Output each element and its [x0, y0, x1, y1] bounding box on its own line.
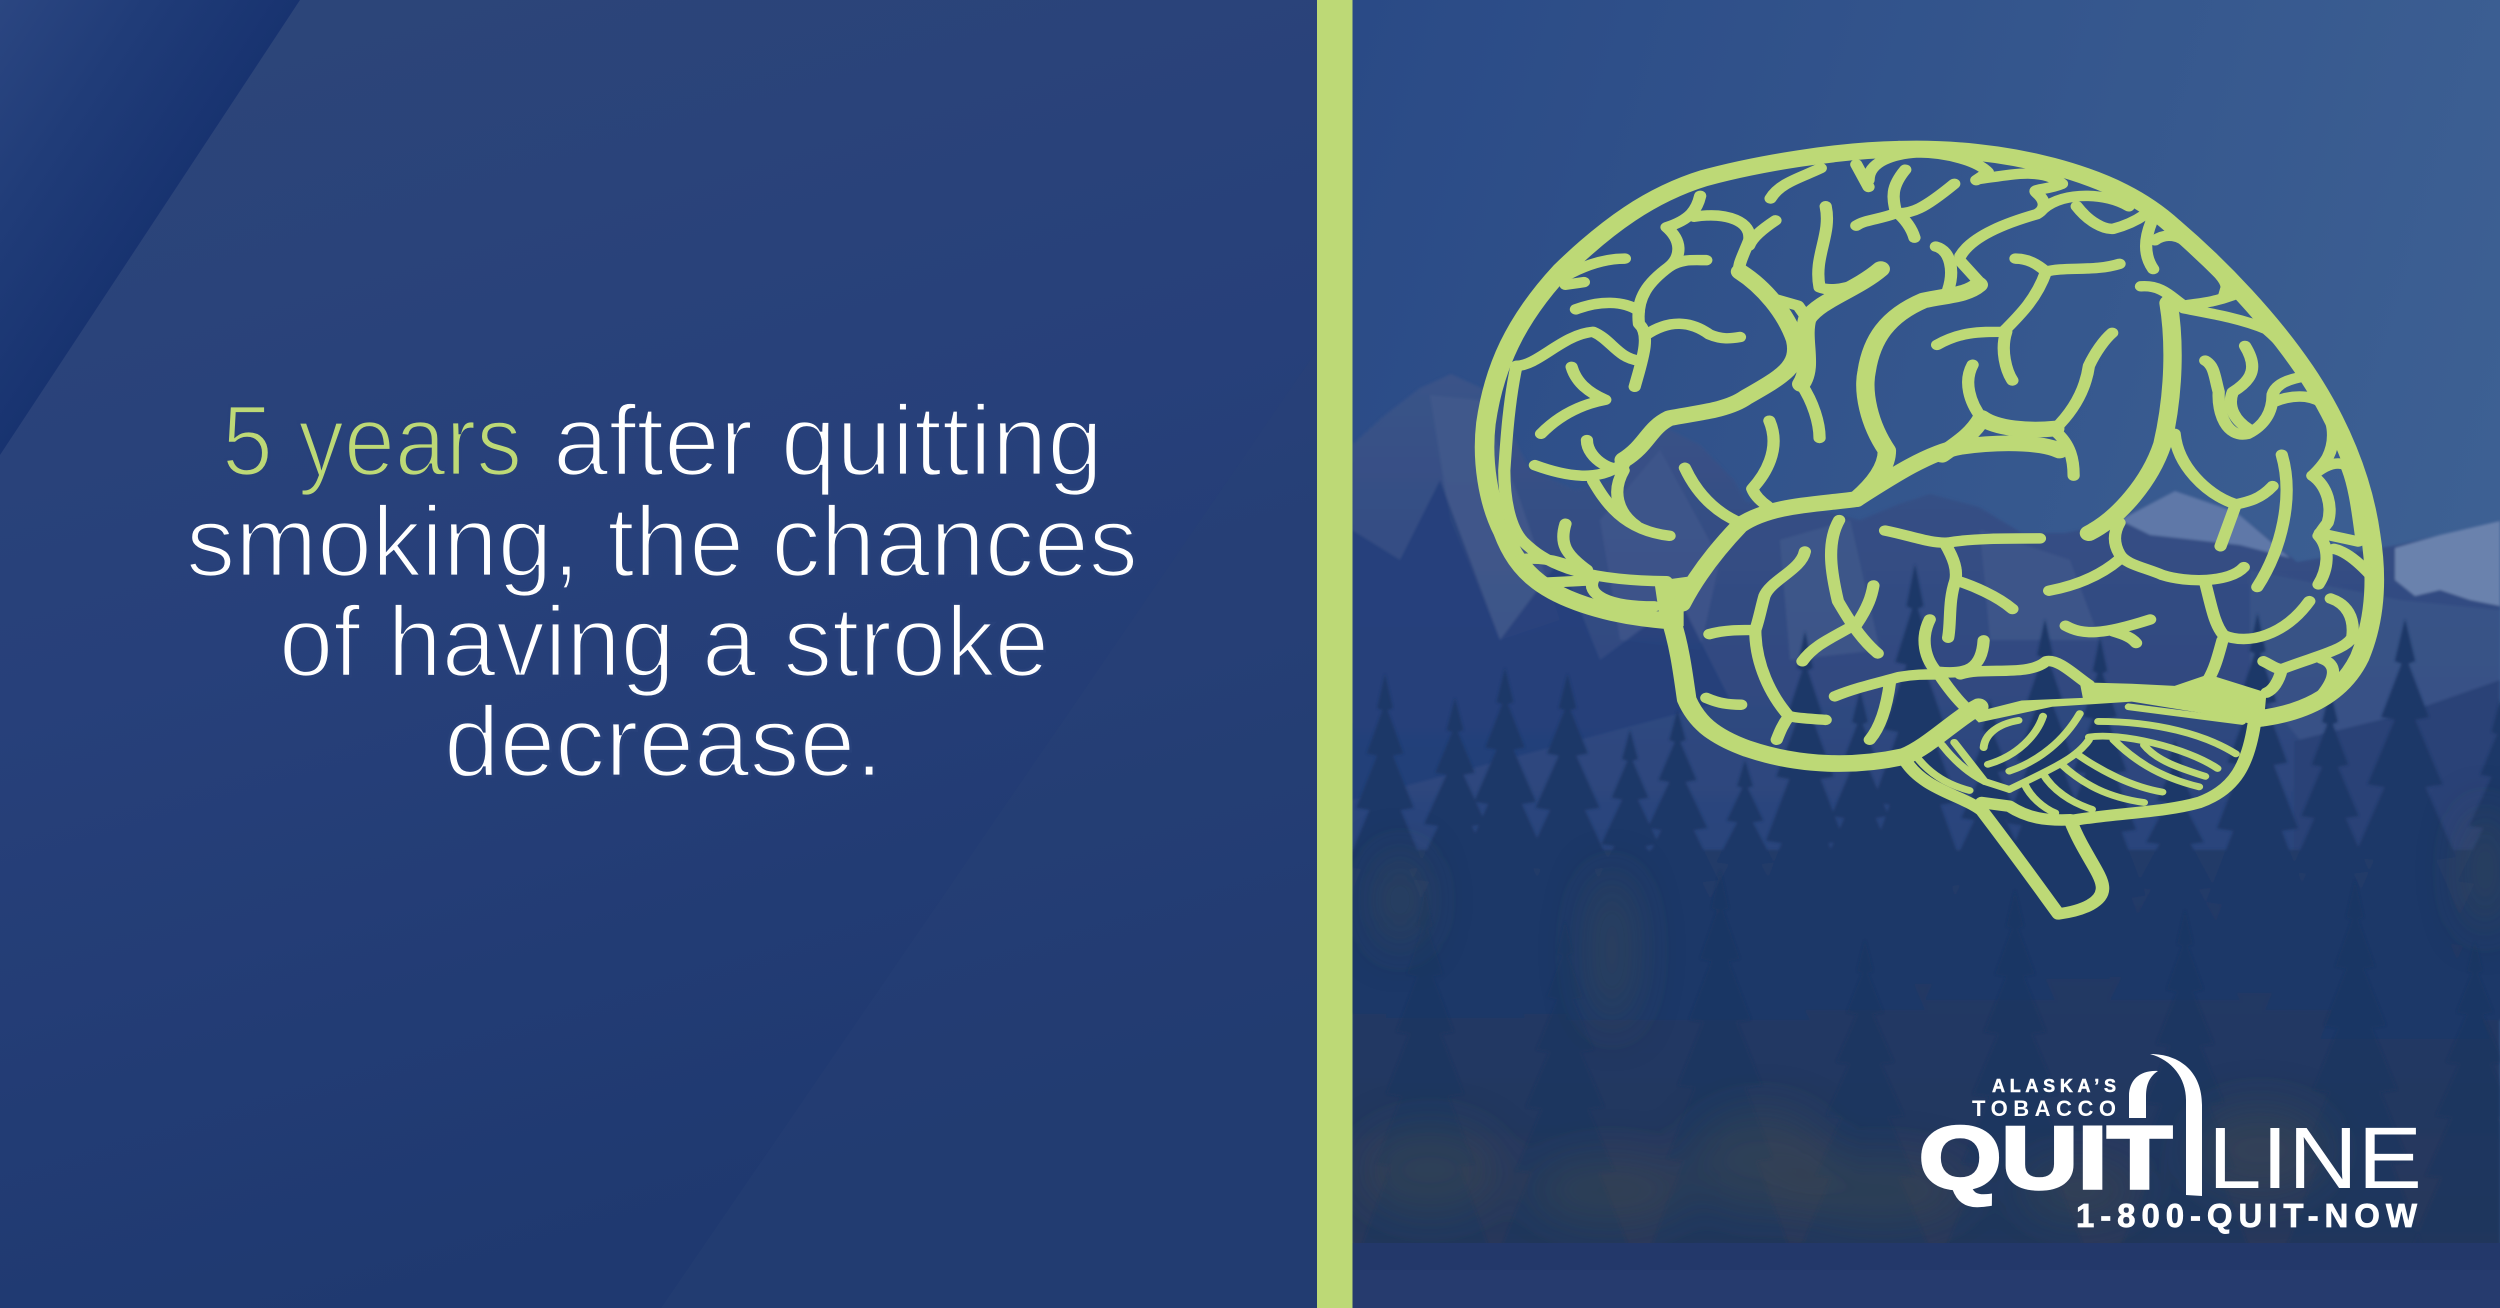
junction mass at lower left of temporal lobe: [1654, 575, 1700, 626]
text: after quitting: after quitting: [553, 385, 1103, 497]
main statement text: [186, 385, 1138, 798]
text: Alaska's: ALASKA’S: [1992, 1076, 2116, 1096]
text: LINE: LINE: [2208, 1110, 2422, 1207]
text: decrease.: decrease.: [444, 686, 883, 798]
decorative top-left dark wedge: [0, 0, 300, 455]
cerebellum and brain stem outline: [1905, 724, 2254, 914]
logo arch: short arc: [2129, 1071, 2158, 1118]
forest: [1320, 564, 2500, 1250]
text: QUIT: QUIT: [1919, 1108, 2172, 1207]
highlighted text: 5 years: 5 years: [222, 385, 522, 497]
second row of darker trees: [1360, 870, 2500, 1250]
thick sulci: [1624, 269, 2173, 604]
icon: brain outline: [1485, 149, 2374, 914]
lake: [1352, 1243, 2500, 1308]
text: of having a stroke: of having a stroke: [279, 586, 1049, 698]
decorative lower-right lighter facet: [661, 350, 1317, 1308]
text: smoking, the chances: smoking, the chances: [186, 486, 1138, 598]
medium sulci: [1504, 152, 2371, 740]
text: phone number: 1-800-QUIT-NOW: [2076, 1197, 2418, 1234]
logo arch: tall arc: [2150, 1054, 2202, 1196]
text: Tobacco: TOBACCO: [1972, 1096, 2116, 1121]
logo: Alaska's Tobacco Quitline: [1919, 1054, 2422, 1234]
cerebellum folds: [1914, 707, 2242, 813]
brain outer rim: [1485, 149, 2374, 764]
central brain mass above the cerebellum: [1970, 674, 2266, 727]
green vertical divider: [1317, 0, 1352, 1308]
autumn foliage tints: [1360, 806, 2500, 1224]
panel: right photo background of mountains and forest: [1320, 0, 2500, 1308]
panel: left background: [0, 0, 1320, 1308]
